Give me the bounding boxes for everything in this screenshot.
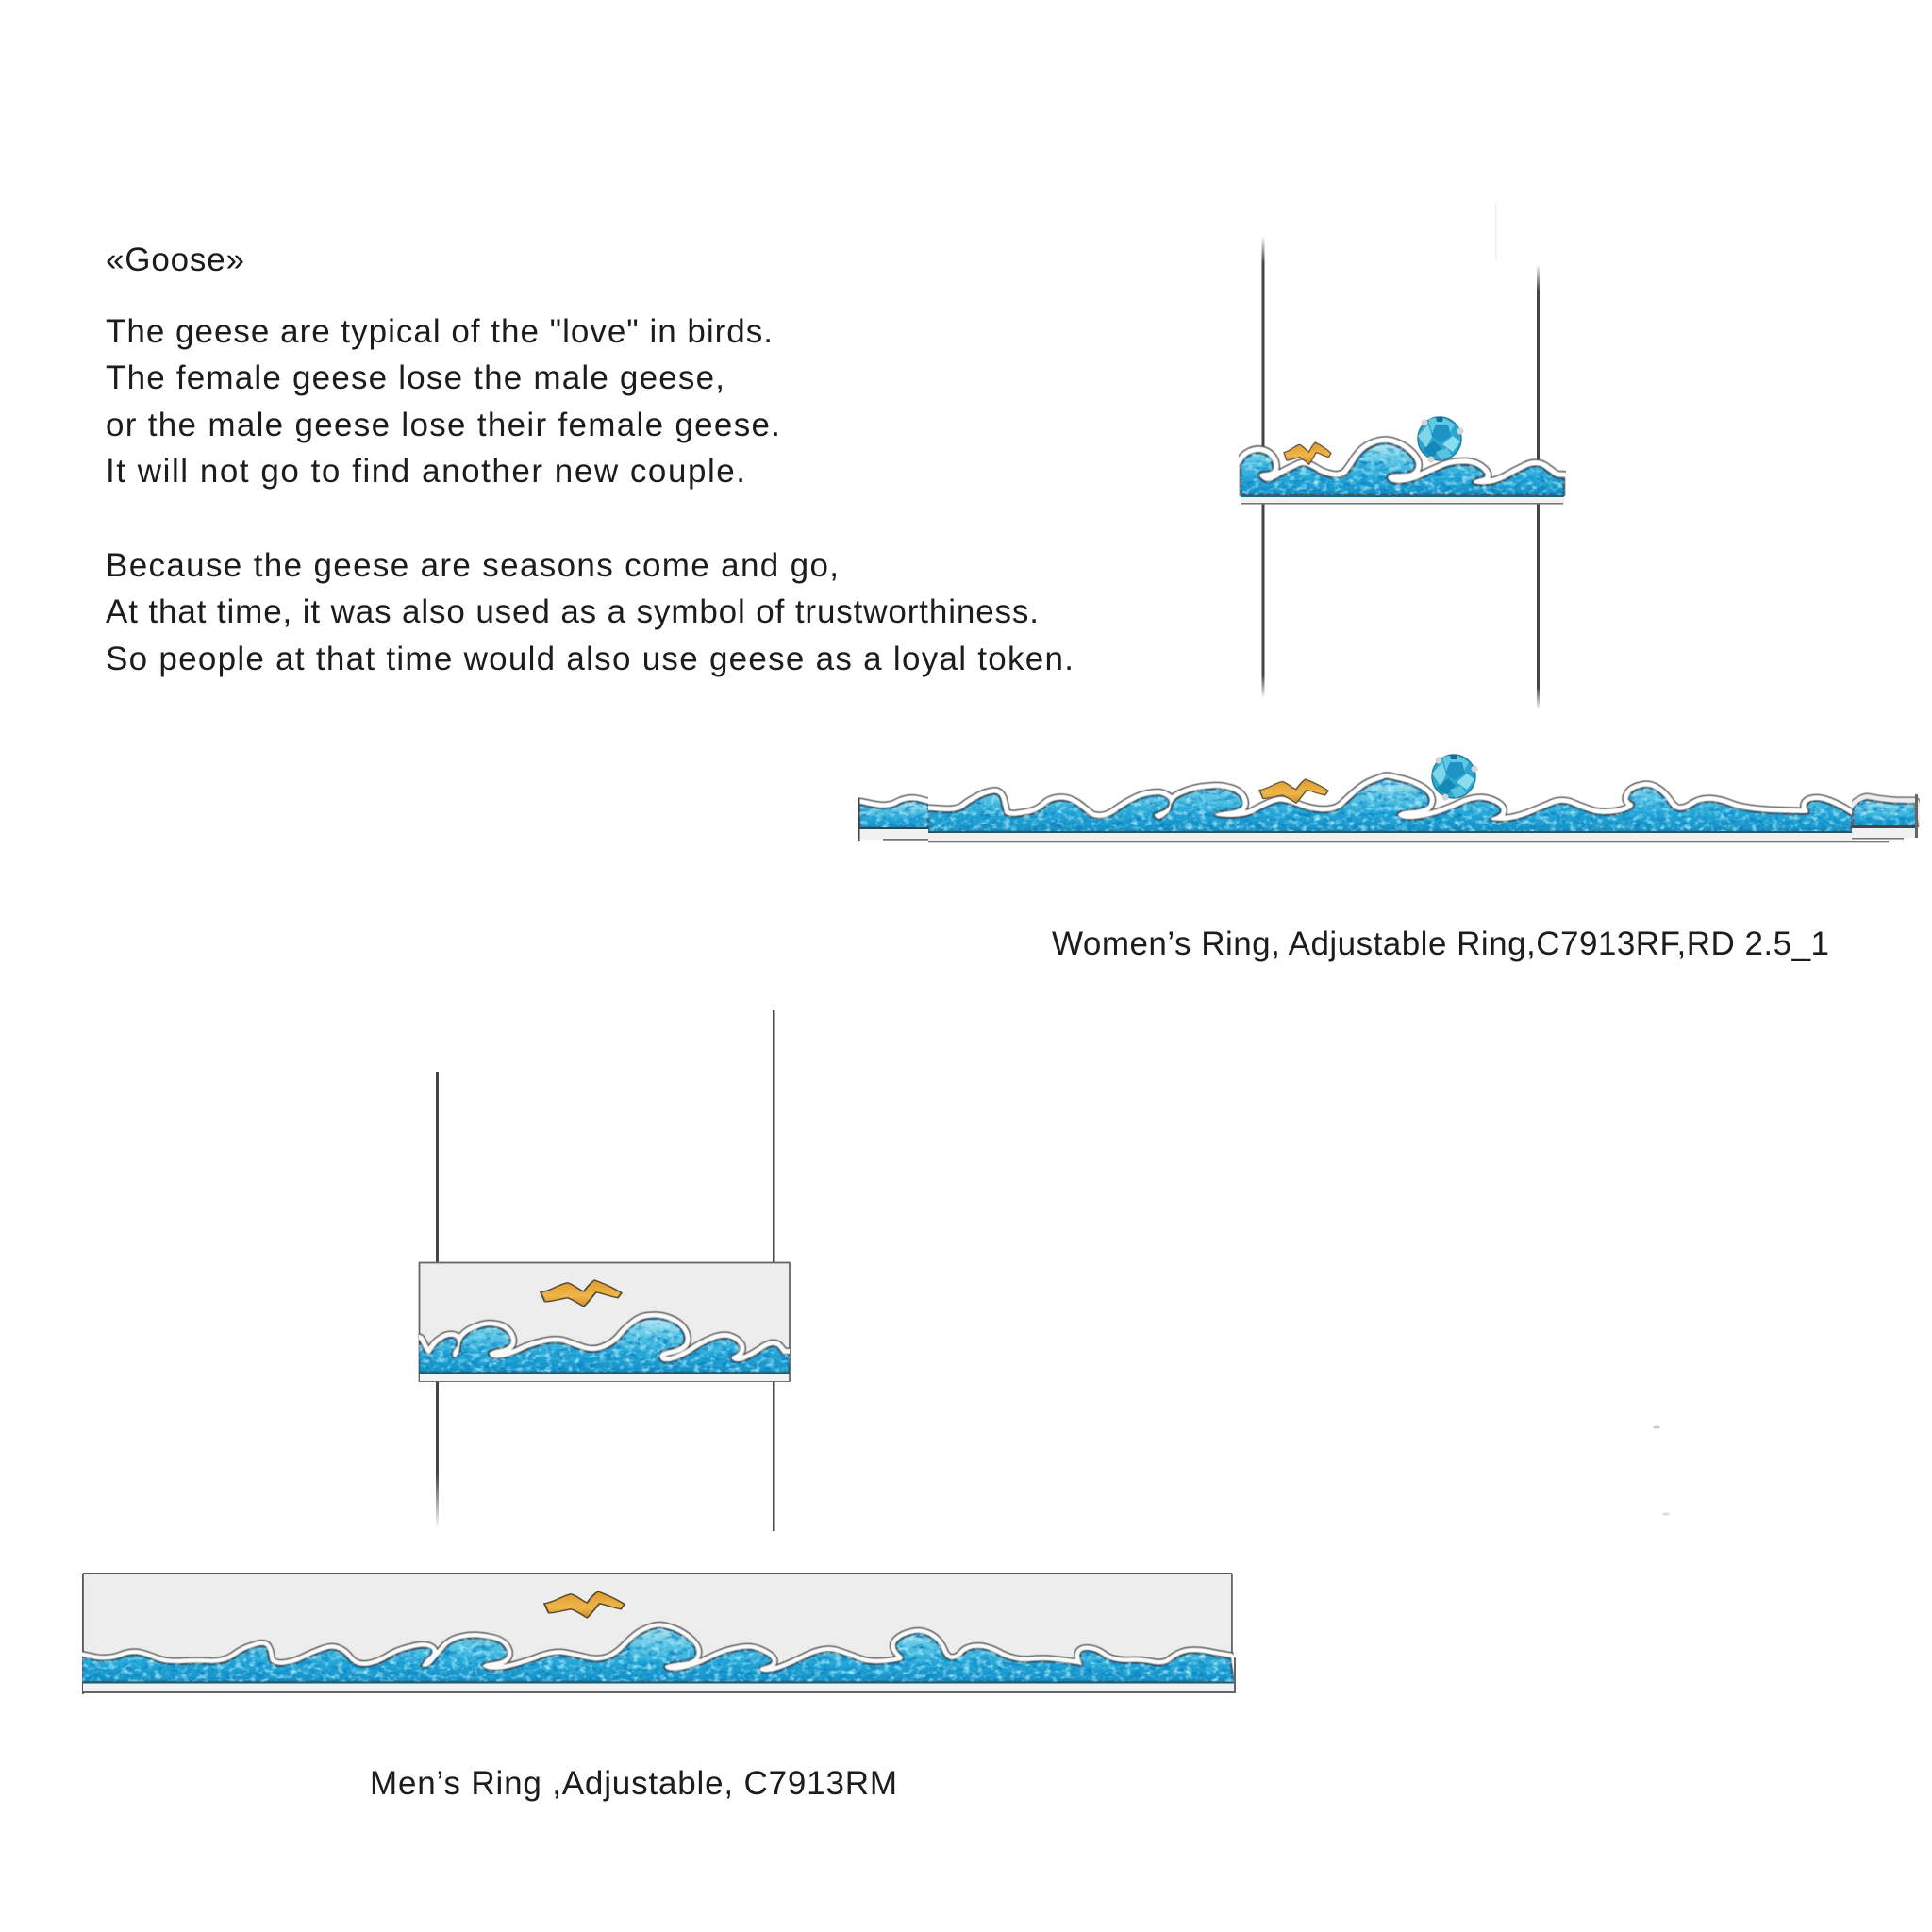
text block: poem first stanza (106, 313, 780, 490)
women's ring band (1241, 443, 1564, 505)
caption: women's ring: Women’s Ring, Adjustable Ring,C7913RF,RD 2.5_1 (1052, 925, 1829, 962)
icon: gold goose (1284, 442, 1331, 464)
text block: poem second stanza (106, 547, 1074, 677)
men's ring flat band (82, 1573, 1236, 1694)
text block: poem second stanza: At that time, it was also used as a symbol of trustworthiness. (106, 593, 1039, 630)
icon: blue topaz gem (1432, 755, 1477, 800)
men's ring front view (419, 1010, 790, 1531)
caption: men's ring: Men’s Ring ,Adjustable, C7913RM (370, 1765, 897, 1802)
men's ring shank lines (436, 1010, 775, 1531)
band end cap right (1852, 794, 1918, 840)
text block: poem first stanza: The female geese lose the male geese, (106, 359, 724, 396)
text block: poem second stanza: Because the geese are seasons come and go, (106, 547, 839, 584)
women's ring shank lines (1262, 203, 1540, 709)
men's ring band (419, 1262, 790, 1381)
women's ring front view (1241, 203, 1564, 709)
icon: gold goose (541, 1280, 622, 1307)
text block: poem first stanza: It will not go to find another new couple. (106, 453, 745, 490)
text block: poem first stanza: The geese are typical of the "love" in birds. (106, 313, 773, 350)
text block: poem first stanza: or the male geese lose their female geese. (106, 407, 780, 443)
icon: gold goose (544, 1591, 625, 1618)
band main section with waves (928, 779, 1889, 842)
icon: gold goose (1259, 779, 1328, 803)
band end cap left (858, 798, 928, 841)
text block: poem second stanza: So people at that time would also use geese as a loyal token. (106, 641, 1074, 677)
women's ring flat band (858, 755, 1918, 842)
title: «Goose» (106, 242, 244, 278)
wave band (82, 1628, 1234, 1682)
icon: blue topaz gem (1418, 417, 1464, 462)
